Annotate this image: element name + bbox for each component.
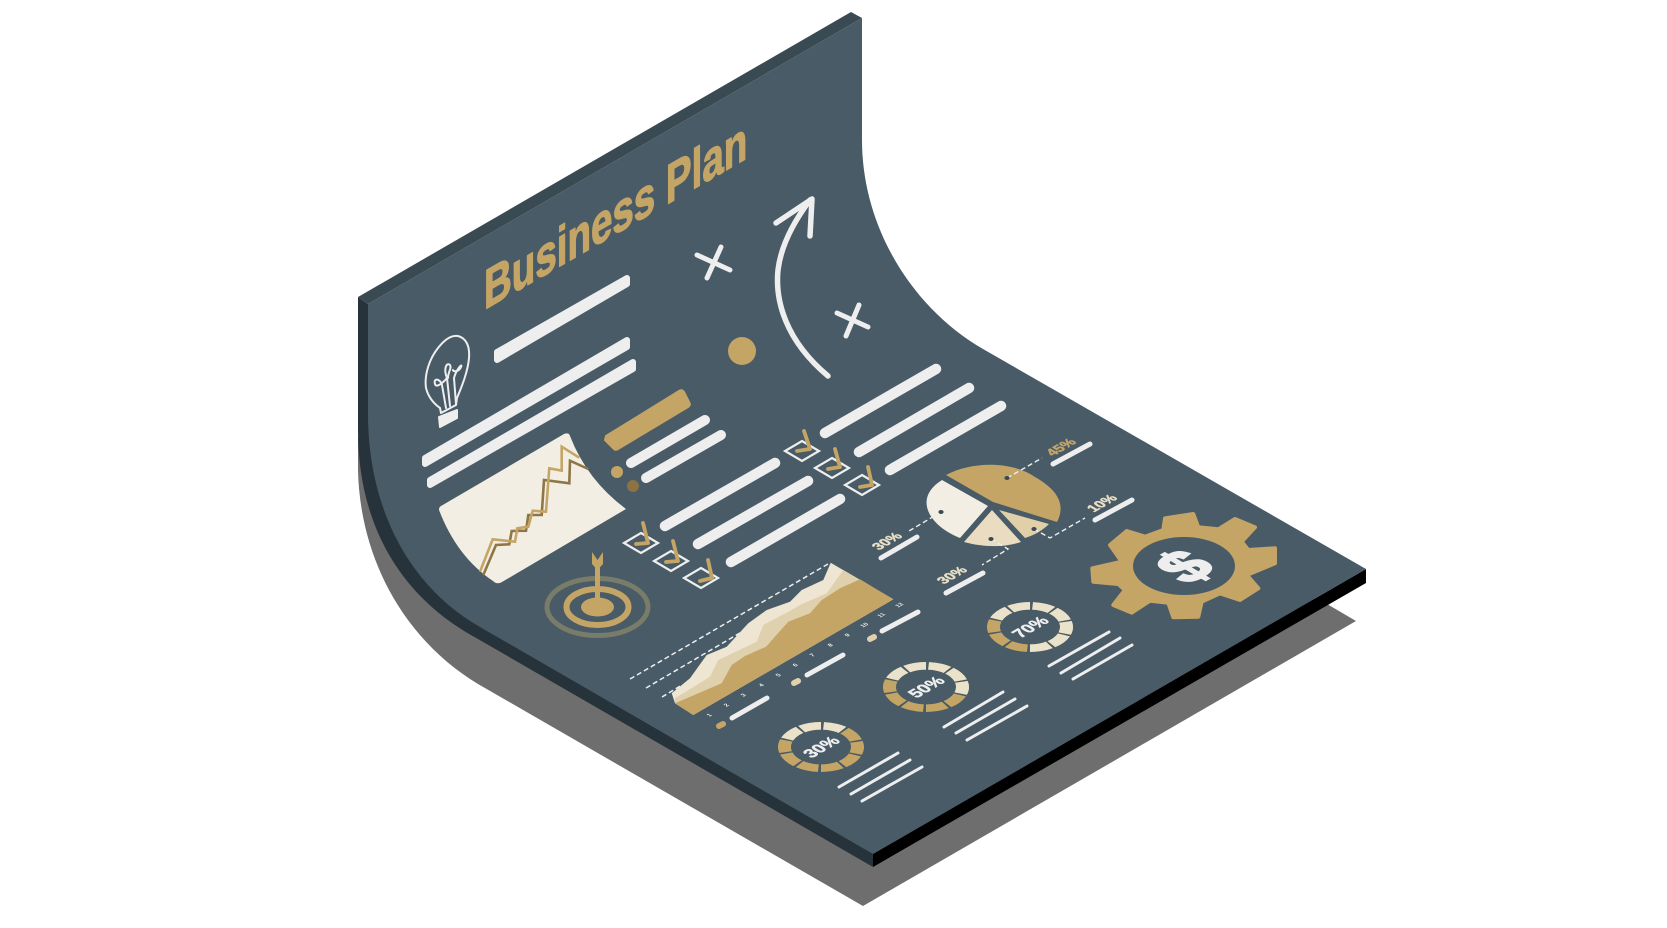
donut: 50% [878, 659, 974, 715]
checkboxes upper [785, 431, 879, 495]
bullet dots [611, 466, 639, 492]
chart axis numbers: 6 [792, 663, 801, 668]
drop shadow [358, 437, 1356, 906]
chart axis numbers: 10 [860, 622, 871, 629]
pie labels: 30% [868, 530, 906, 552]
growth arrow [776, 199, 828, 376]
chart axis numbers: 8 [827, 643, 836, 648]
pie labels: 10% [1083, 492, 1121, 514]
cross marks [697, 247, 868, 336]
pie labels: 45% [1042, 436, 1080, 458]
chart axis numbers: 12 [895, 602, 906, 609]
gold heading bar [605, 390, 690, 450]
text lines: 70% [1049, 632, 1132, 679]
area chart [630, 563, 893, 715]
chart axis numbers: 4 [758, 683, 767, 688]
chart axis numbers: 9 [844, 633, 853, 638]
chart axis numbers: 1 [706, 713, 715, 718]
chart legend [719, 612, 918, 726]
sheet left and front edge [358, 297, 873, 867]
pie labels [868, 436, 1121, 586]
chart axis numbers [706, 602, 906, 718]
icon: gear with dollar: $ [1140, 541, 1230, 593]
checklist lines lower [665, 463, 840, 562]
chart axis numbers: 7 [809, 653, 818, 658]
icon: light bulb [426, 336, 469, 427]
text lines: wall [425, 278, 633, 485]
chart axis numbers: 5 [775, 673, 784, 678]
checklist lines upper [825, 369, 1001, 470]
donut: 70% [982, 599, 1078, 655]
sheet right edge [873, 569, 1366, 867]
text lines: 30% [839, 753, 922, 801]
title: Business Plan [484, 107, 747, 322]
donut: 70%: 70% [1008, 614, 1053, 641]
icon: target [547, 552, 648, 636]
checkboxes lower [624, 523, 718, 588]
donut: 50%: 50% [904, 674, 949, 701]
pie label bars [881, 444, 1132, 593]
sheet surface [368, 18, 1366, 854]
sheet top edge [358, 12, 862, 304]
donut: 30%: 30% [799, 734, 844, 761]
bullet text lines [631, 420, 721, 478]
pie labels: 30% [933, 564, 971, 586]
chart axis numbers: 2 [723, 703, 732, 708]
chart axis numbers: 3 [740, 693, 749, 698]
text lines: 50% [944, 692, 1027, 740]
chart card [439, 433, 626, 583]
donut: 30% [773, 719, 869, 775]
icon: gear with dollar [1092, 514, 1275, 617]
pie chart [909, 458, 1085, 565]
gold dot [728, 337, 756, 365]
chart axis numbers: 11 [877, 612, 888, 619]
